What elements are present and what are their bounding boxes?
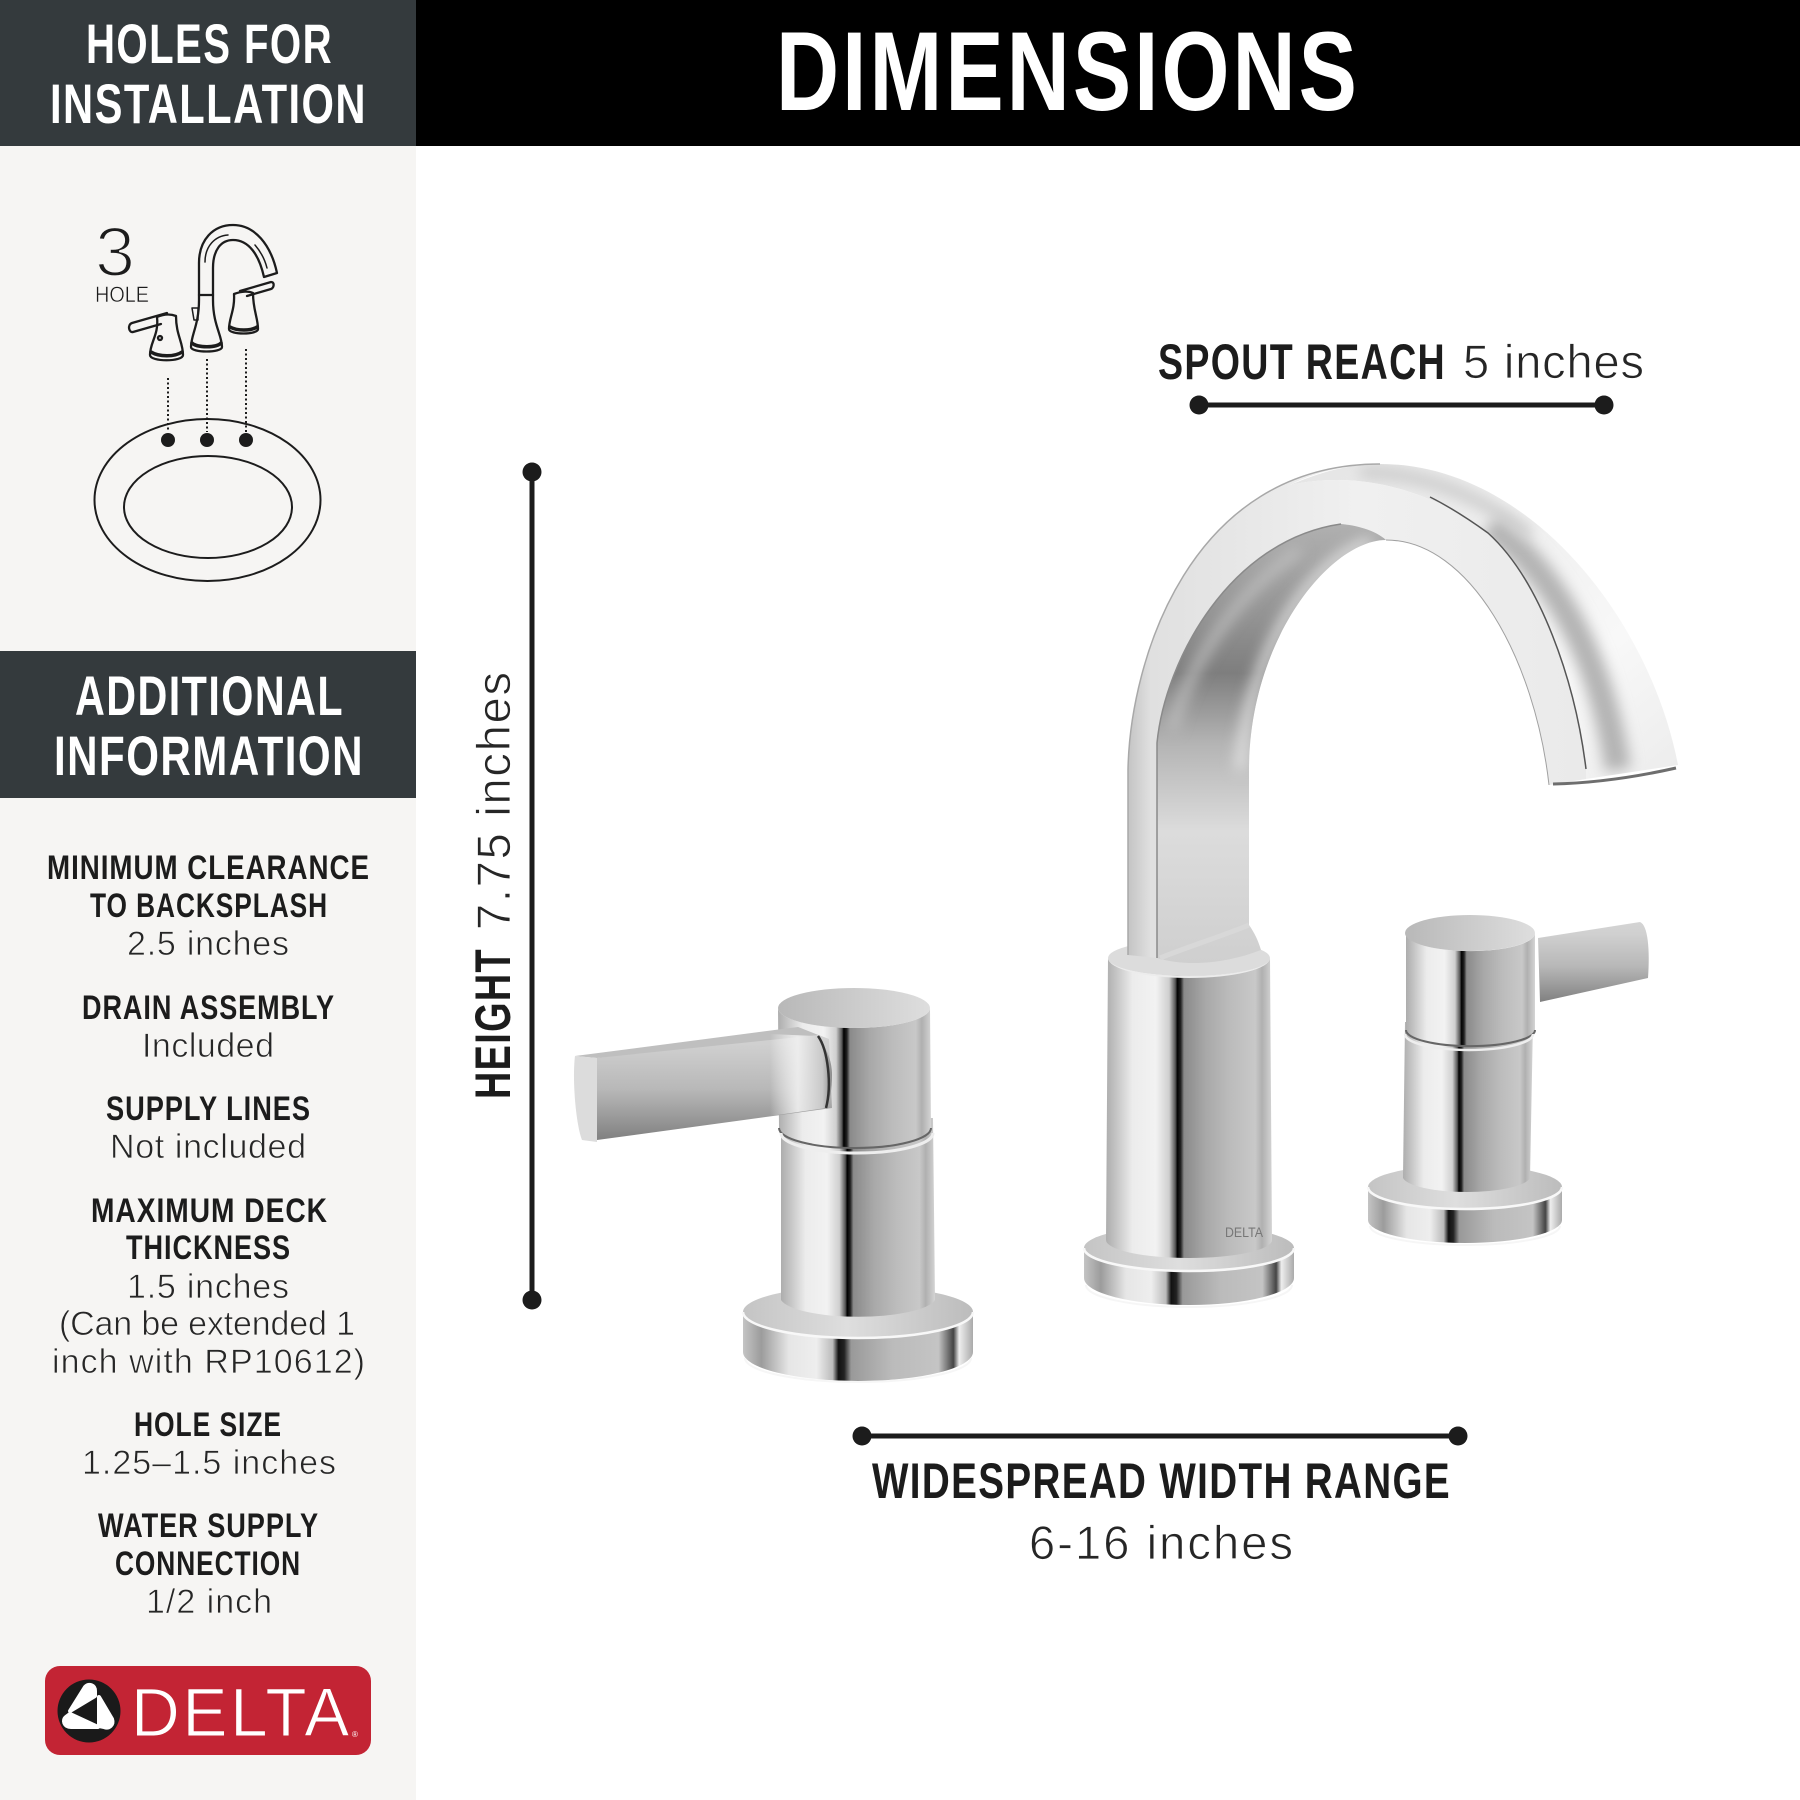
heading: additional information xyxy=(0,651,416,798)
text block: water supply connection: CONNECTION xyxy=(115,1545,301,1583)
dimension: widespread width range: WIDESPREAD WIDTH RANGE xyxy=(872,1453,1451,1509)
icon: three hole installation diagram: HOLE xyxy=(95,282,149,307)
text block: drain assembly xyxy=(82,989,335,1065)
text block: supply lines xyxy=(106,1090,311,1166)
heading: additional information: ADDITIONAL xyxy=(75,664,344,727)
text block: water supply connection xyxy=(98,1507,319,1621)
dimension: spout reach: SPOUT REACH xyxy=(1158,334,1446,390)
illustration: chrome faucet center body and spout: DELTA xyxy=(1225,1224,1264,1240)
heading: additional information: INFORMATION xyxy=(54,724,364,787)
text block: water supply connection: WATER SUPPLY xyxy=(98,1507,319,1545)
text block: supply lines: SUPPLY LINES xyxy=(106,1090,311,1128)
icon: three hole installation diagram xyxy=(94,213,320,581)
logo: delta: DELTA xyxy=(131,1674,352,1751)
title banner: dimensions: DIMENSIONS xyxy=(776,9,1360,134)
text block: hole size: 1.25–1.5 inches xyxy=(82,1444,336,1482)
text block: supply lines: Not included xyxy=(110,1128,306,1166)
text block: drain assembly: Included xyxy=(142,1027,274,1065)
text block: minimum clearance: MINIMUM CLEARANCE xyxy=(47,849,370,887)
text block: maximum deck thickness: (Can be extended 1 xyxy=(59,1305,355,1343)
text block: maximum deck thickness: 1.5 inches xyxy=(127,1268,289,1306)
text block: maximum deck thickness: inch with RP10612) xyxy=(52,1343,365,1381)
text block: maximum deck thickness: MAXIMUM DECK xyxy=(91,1192,328,1230)
logo: delta: ® xyxy=(352,1730,358,1739)
heading: holes for installation: HOLES FOR xyxy=(86,12,333,75)
illustration: right handle xyxy=(1368,915,1649,1245)
text block: hole size xyxy=(82,1406,336,1482)
dimension: widespread width range xyxy=(852,1426,1468,1569)
dimension: height xyxy=(465,462,542,1310)
panel: left sidebar xyxy=(0,146,416,1800)
dimension: widespread width range: 6-16 inches xyxy=(1029,1516,1293,1569)
heading: holes for installation xyxy=(0,0,416,146)
text block: water supply connection: 1/2 inch xyxy=(146,1583,272,1621)
text block: maximum deck thickness: THICKNESS xyxy=(126,1229,291,1267)
text block: minimum clearance: TO BACKSPLASH xyxy=(90,887,328,925)
dimension: spout reach: 5 inches xyxy=(1463,335,1644,388)
text block: hole size: HOLE SIZE xyxy=(134,1406,282,1444)
illustration: left handle xyxy=(574,988,973,1382)
text block: minimum clearance: 2.5 inches xyxy=(127,925,289,963)
dimension: height: 7.75 inches xyxy=(467,672,520,930)
icon: three hole installation diagram: 3 xyxy=(95,213,135,291)
illustration: chrome faucet center body and spout xyxy=(1084,464,1678,1307)
dimension: spout reach xyxy=(1158,334,1644,414)
logo: delta xyxy=(45,1666,371,1755)
heading: holes for installation: INSTALLATION xyxy=(50,72,367,135)
text block: drain assembly: DRAIN ASSEMBLY xyxy=(82,989,335,1027)
text block: maximum deck thickness xyxy=(52,1192,365,1381)
dimension: height: HEIGHT xyxy=(465,948,521,1099)
text block: minimum clearance xyxy=(47,849,370,963)
title banner: dimensions xyxy=(416,0,1800,146)
